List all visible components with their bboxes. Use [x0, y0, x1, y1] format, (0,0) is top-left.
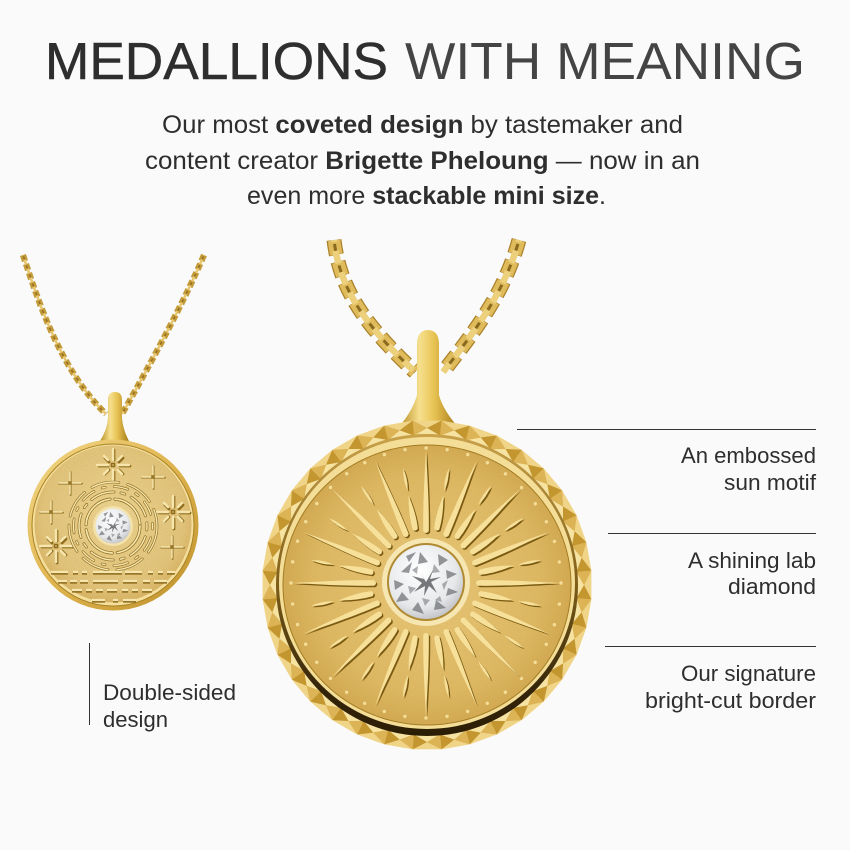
small medallion morse lines: [51, 572, 175, 601]
small medallion concentric rings: [69, 482, 157, 570]
callout: embossed sun motif: sun motif: [724, 470, 817, 495]
bright-cut border: [263, 421, 591, 749]
title: [45, 33, 805, 91]
small medallion diamond: [93, 506, 133, 546]
subtitle text block: content creator Brigette Pheloung — now in an: [145, 147, 700, 175]
large medallion inner ring and disc: [279, 437, 575, 729]
callout: double-sided design: design: [103, 707, 168, 732]
callout: embossed sun motif: [517, 430, 817, 495]
small chain: [23, 255, 204, 414]
small necklace: double-sided medallion: [23, 255, 204, 610]
callout: shining lab diamond: A shining lab: [688, 548, 816, 573]
small bail: [100, 392, 129, 441]
callout: bright-cut border: Our signature: [681, 661, 816, 686]
callout: bright-cut border: [605, 646, 816, 713]
small medallion rim: [28, 440, 198, 610]
callout: double-sided design: [90, 643, 236, 732]
large necklace: sun medallion: [263, 240, 591, 749]
callout: shining lab diamond: [608, 534, 816, 599]
callout: double-sided design: Double-sided: [103, 680, 236, 705]
small medallion stars: [40, 449, 190, 563]
lab diamond with bezel: [382, 538, 470, 626]
large chain: [334, 240, 519, 372]
subtitle text block: [145, 111, 700, 210]
small medallion textured disc: [34, 445, 192, 603]
title: MEDALLIONS: [45, 33, 388, 91]
embossed sun rays: [291, 448, 561, 718]
callout: shining lab diamond: diamond: [728, 574, 816, 599]
title: WITH MEANING: [405, 33, 805, 91]
callout: embossed sun motif: An embossed: [681, 443, 816, 468]
subtitle text block: even more stackable mini size.: [247, 182, 606, 210]
large bail: [399, 330, 458, 427]
callout: bright-cut border: bright-cut border: [645, 688, 816, 713]
subtitle text block: Our most coveted design by tastemaker and: [162, 111, 683, 139]
